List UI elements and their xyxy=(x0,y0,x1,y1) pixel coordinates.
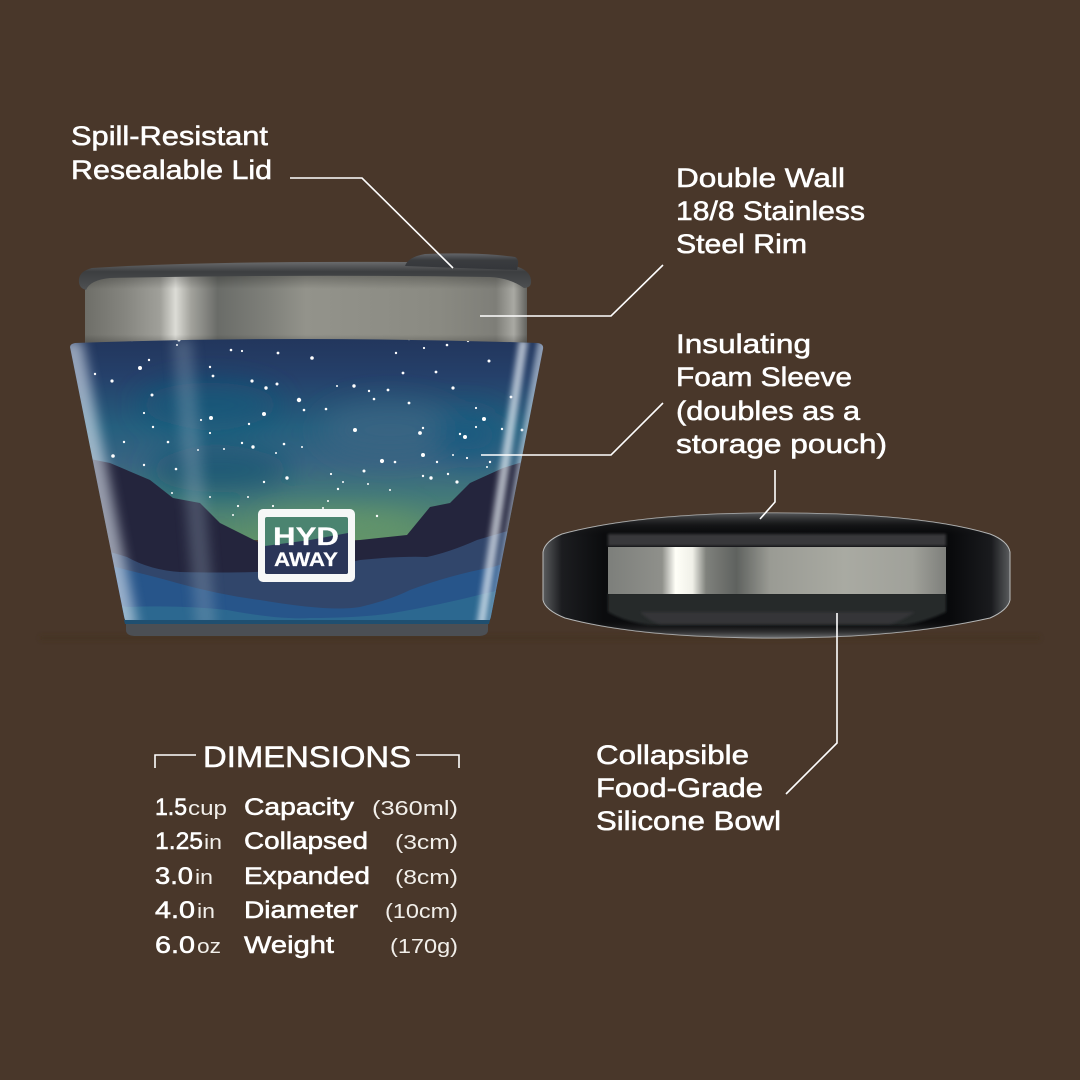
product: expanded bowl with sleeve xyxy=(60,253,560,636)
row: expanded xyxy=(155,863,458,890)
wave layers xyxy=(111,531,508,608)
bowl base xyxy=(126,622,488,636)
callout: sleeve xyxy=(676,329,887,459)
row: expanded: (8cm) xyxy=(395,867,458,889)
callout: sleeve: Insulating xyxy=(676,329,811,359)
HYD AWAY logo badge: AWAY xyxy=(274,549,338,571)
inner silicone xyxy=(608,593,946,625)
HYD AWAY logo badge: HYD xyxy=(273,523,339,551)
inner silicone lower band xyxy=(640,612,915,624)
stars xyxy=(94,338,523,517)
lid xyxy=(79,253,531,290)
line: sleeve to bowl xyxy=(760,470,775,519)
bowl shading xyxy=(543,513,1010,638)
row: weight: 6.0 xyxy=(155,932,195,959)
ground line xyxy=(40,636,1040,640)
dimensions heading: DIMENSIONS xyxy=(203,741,411,774)
row: weight: (170g) xyxy=(390,936,458,958)
product: collapsed bowl xyxy=(543,513,1010,638)
callout: rim: Steel Rim xyxy=(676,229,807,259)
dimensions table xyxy=(155,741,459,959)
row: expanded: in xyxy=(195,867,213,889)
row: diameter: (10cm) xyxy=(385,901,458,923)
callout: rim: Double Wall xyxy=(676,163,845,193)
row: capacity: cup xyxy=(188,798,227,820)
row: capacity: 1.5 xyxy=(155,794,187,821)
aurora glow xyxy=(140,383,505,539)
callout: rim xyxy=(676,163,865,259)
row: capacity: (360ml) xyxy=(372,798,458,820)
callout: sleeve: storage pouch) xyxy=(676,429,887,459)
sleeve gloss: centre streak xyxy=(172,338,216,630)
HYD AWAY logo badge xyxy=(258,509,355,582)
dimensions heading xyxy=(155,741,459,774)
row: diameter: in xyxy=(197,901,215,923)
row: collapsed: (3cm) xyxy=(395,832,458,854)
line: lid xyxy=(290,178,453,268)
bowl body xyxy=(543,513,1010,638)
row: collapsed xyxy=(155,828,458,855)
callout: sleeve: (doubles as a xyxy=(676,396,861,426)
insulating foam sleeve with night sky xyxy=(60,335,560,630)
row: collapsed: in xyxy=(204,832,222,854)
inner ring xyxy=(608,534,946,546)
row: weight xyxy=(155,932,458,959)
callout: lid: Resealable Lid xyxy=(71,155,272,185)
line: sleeve xyxy=(481,403,663,455)
sleeve gloss: right streak xyxy=(476,340,528,630)
row: diameter: 4.0 xyxy=(155,897,195,924)
row: expanded: 3.0 xyxy=(155,863,193,890)
row: expanded: Expanded xyxy=(244,863,370,890)
row: collapsed: Collapsed xyxy=(244,828,368,855)
row: capacity xyxy=(155,794,458,821)
callout lines xyxy=(290,178,837,794)
line: rim xyxy=(480,265,663,316)
callout: sleeve: Foam Sleeve xyxy=(676,362,852,392)
sleeve bottom band xyxy=(124,620,490,624)
row: weight: Weight xyxy=(244,932,334,959)
row: capacity: Capacity xyxy=(244,794,355,821)
callout: rim: 18/8 Stainless xyxy=(676,196,865,226)
stainless base of bowl xyxy=(608,547,946,594)
callout: silicone bowl: Silicone Bowl xyxy=(596,806,781,836)
sleeve gloss: left edge xyxy=(60,340,138,630)
sky gradient xyxy=(60,335,560,540)
row: diameter xyxy=(155,897,458,924)
row: weight: oz xyxy=(197,936,221,958)
line: silicone bowl xyxy=(786,613,837,794)
callout: lid xyxy=(71,121,272,185)
sleeve gloss: right edge xyxy=(488,343,544,620)
callout: lid: Spill-Resistant xyxy=(71,121,269,151)
mountains xyxy=(92,460,521,572)
row: diameter: Diameter xyxy=(244,897,358,924)
callout: silicone bowl: Collapsible xyxy=(596,740,749,770)
callout: silicone bowl xyxy=(596,740,781,836)
row: collapsed: 1.25 xyxy=(155,828,203,855)
callout: silicone bowl: Food-Grade xyxy=(596,773,763,803)
stainless steel rim xyxy=(85,275,527,345)
